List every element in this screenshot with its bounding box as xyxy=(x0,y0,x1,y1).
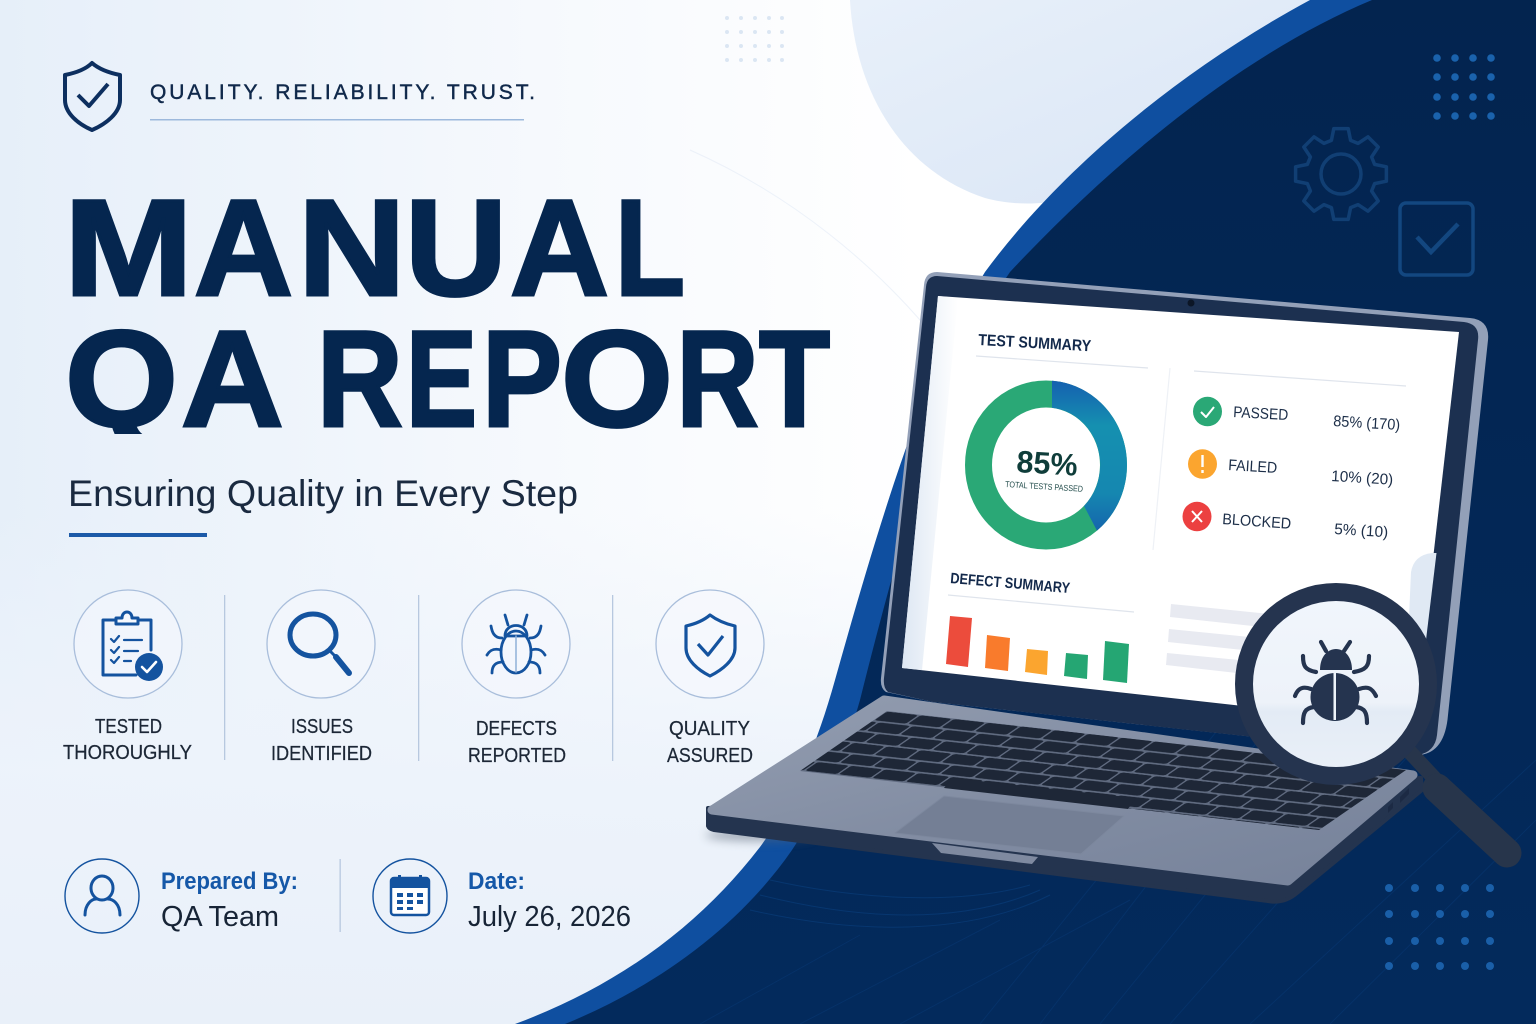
feature: defects reported xyxy=(462,590,570,767)
icon: magnifier xyxy=(290,614,349,673)
icon: header shield xyxy=(65,63,120,130)
title: R xyxy=(317,303,403,456)
screen panel: defect summary xyxy=(946,570,1290,683)
tagline: QUALITY. RELIABILITY. TRUST. xyxy=(150,81,535,104)
label: ASSURED xyxy=(667,744,753,767)
screen panel: test summary xyxy=(976,332,1406,550)
label: ISSUES xyxy=(291,715,353,738)
icon: person xyxy=(85,876,120,915)
trackpad xyxy=(895,796,1124,854)
title: Q xyxy=(65,303,178,456)
title: E xyxy=(406,303,477,456)
laptop xyxy=(705,272,1488,902)
feature: tested thoroughly xyxy=(63,590,192,764)
label: IDENTIFIED xyxy=(271,742,372,765)
bar chart xyxy=(946,616,1129,683)
label xyxy=(271,715,372,765)
title xyxy=(69,199,830,434)
screen panel: test summary: TEST SUMMARY xyxy=(978,332,1092,355)
icon: clipboard xyxy=(103,612,163,681)
icon: shield check xyxy=(686,615,735,676)
title: T xyxy=(759,303,830,456)
title: A xyxy=(194,172,293,325)
date: July 26, 2026 xyxy=(468,901,631,933)
label xyxy=(63,715,192,764)
title: L xyxy=(615,172,685,325)
laptop lid xyxy=(881,272,1488,755)
subtitle: Ensuring Quality in Every Step xyxy=(68,473,578,514)
title: M xyxy=(64,172,193,325)
faint dot pattern top xyxy=(725,16,784,62)
screen xyxy=(902,296,1459,725)
header xyxy=(65,63,535,130)
icon: checkbox xyxy=(1400,203,1473,275)
magnifying glass xyxy=(1244,592,1507,853)
title: U xyxy=(405,172,507,325)
title: P xyxy=(482,303,562,456)
dot grid bottom right xyxy=(1385,884,1494,970)
dot grid top right xyxy=(1433,54,1495,120)
label: DEFECTS xyxy=(476,717,557,740)
ports xyxy=(1388,788,1409,813)
handle xyxy=(1408,750,1507,853)
title: N xyxy=(298,172,406,325)
prepared by: QA Team xyxy=(161,901,279,933)
prepared by: Prepared By: xyxy=(161,868,298,895)
status: failed: FAILED xyxy=(1228,457,1278,477)
label: REPORTED xyxy=(468,744,566,767)
title: A xyxy=(510,172,609,325)
laptop base xyxy=(708,700,1422,902)
prepared by xyxy=(65,859,298,933)
label: QUALITY xyxy=(669,717,750,740)
subtitle xyxy=(68,473,578,537)
date: Date: xyxy=(468,868,525,895)
feature: quality assured xyxy=(656,590,764,767)
screen panel: defect summary: DEFECT SUMMARY xyxy=(950,570,1071,597)
status: passed: 85% (170) xyxy=(1333,413,1401,434)
title: R xyxy=(676,303,758,456)
keyboard xyxy=(800,711,1406,830)
status: passed xyxy=(1193,397,1401,434)
status: blocked xyxy=(1182,502,1389,541)
label xyxy=(468,717,566,767)
icon: bug outline xyxy=(487,615,545,673)
date xyxy=(373,859,631,933)
icon: bug xyxy=(1295,642,1376,723)
label xyxy=(667,717,753,767)
placeholder rows xyxy=(1166,604,1290,679)
label: TESTED xyxy=(95,715,162,738)
label: THOROUGHLY xyxy=(63,741,192,764)
donut chart: TOTAL TESTS PASSED xyxy=(1005,479,1083,494)
title: A xyxy=(181,303,281,456)
donut chart xyxy=(978,381,1127,536)
status: failed xyxy=(1188,449,1394,489)
icon: gear xyxy=(1296,129,1386,219)
title: O xyxy=(561,303,673,456)
status: passed: PASSED xyxy=(1233,404,1289,424)
feature: issues identified xyxy=(267,590,375,765)
icon: calendar xyxy=(391,875,429,915)
status: failed: 10% (20) xyxy=(1331,468,1394,489)
donut chart: 85% xyxy=(1016,444,1079,483)
status: blocked: BLOCKED xyxy=(1222,511,1292,533)
status: blocked: 5% (10) xyxy=(1334,521,1389,541)
